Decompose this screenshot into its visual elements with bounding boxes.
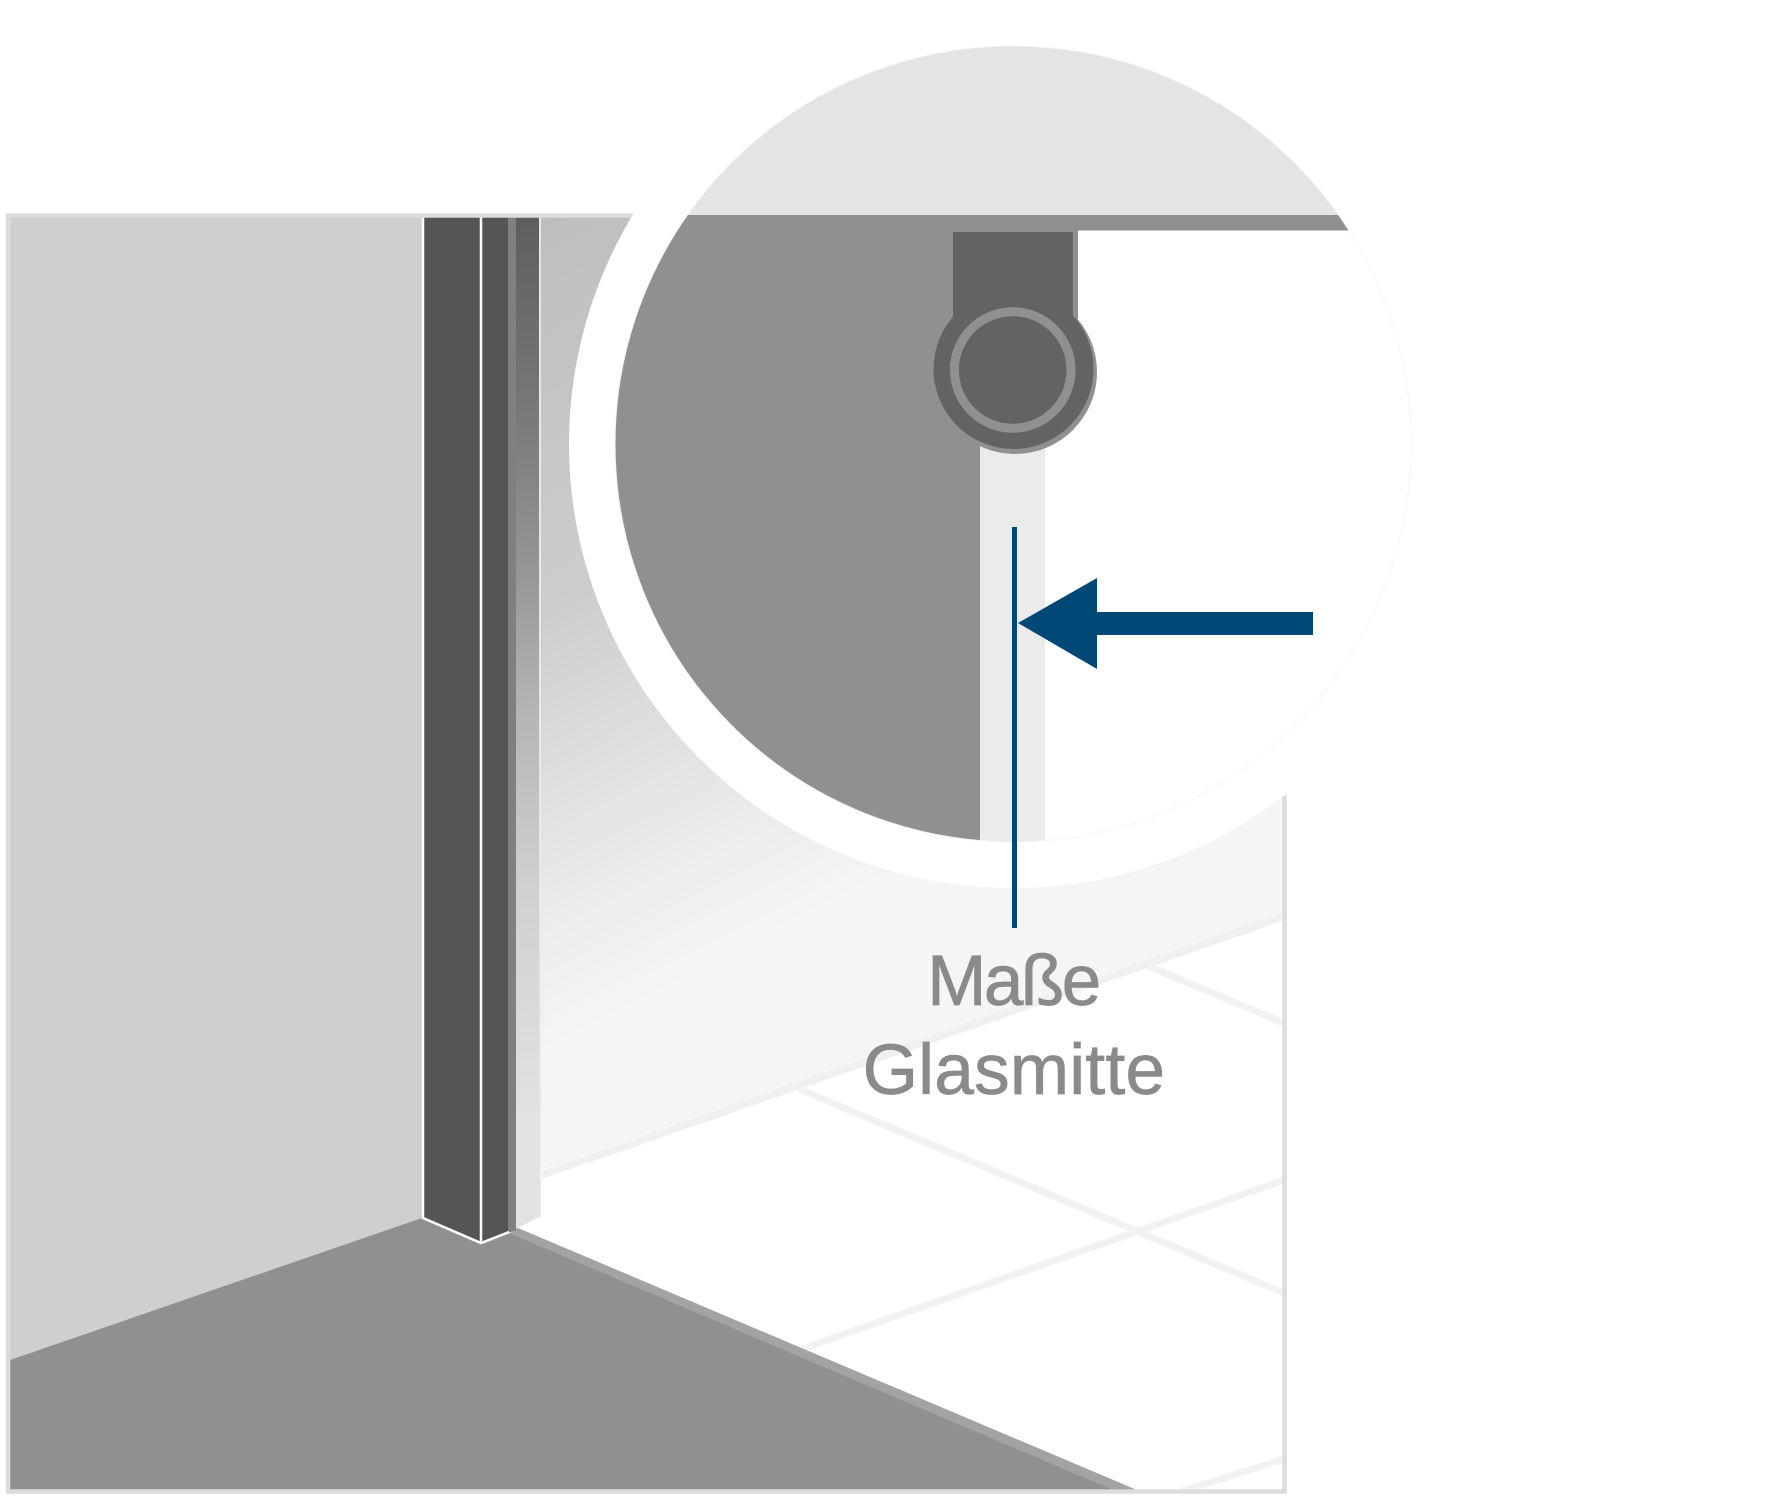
panel: magnifier white ring (569, 0, 1457, 888)
label: Maße Glasmitte: Maße (927, 942, 1099, 1021)
centre line (1012, 527, 1017, 928)
left wall (10, 217, 424, 1367)
panel: room scene (8, 216, 1284, 1492)
floor: dark area (10, 1218, 1114, 1490)
glass pane (980, 420, 1045, 850)
rear wall behind glass (540, 217, 1282, 1171)
magnifier edge (615, 46, 1411, 842)
arrow (1018, 578, 1313, 669)
floor: threshold strip (510, 1228, 1137, 1490)
infographic: shower glass corner detail (6, 46, 1412, 1494)
ceiling band (980, 215, 1348, 230)
ceiling (688, 46, 1338, 215)
panel: magnified detail (616, 46, 1348, 842)
wall section (600, 215, 980, 855)
label: Maße Glasmitte (863, 942, 1165, 1110)
label: Maße Glasmitte: Glasmitte (863, 1031, 1165, 1110)
hinge (933, 232, 1097, 454)
scene frame (8, 216, 1284, 1492)
floor tile lines (542, 913, 1284, 1492)
corner column (422, 217, 540, 1244)
